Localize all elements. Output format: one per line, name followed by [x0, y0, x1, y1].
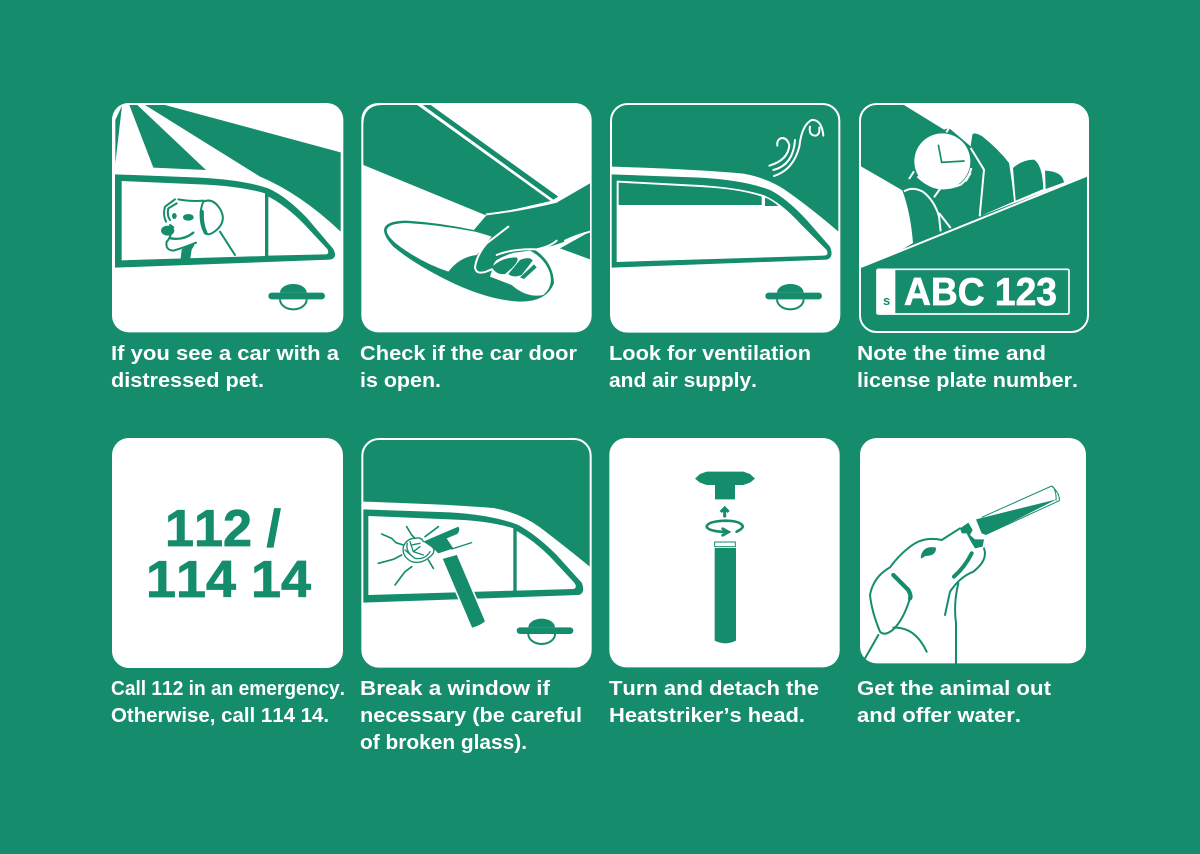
- caption 2: is open.: [360, 369, 441, 392]
- icon: fingers: [904, 133, 1064, 231]
- caption 2: Check if the car door: [360, 342, 577, 365]
- white background wedges: [861, 105, 1087, 267]
- icon: dog in window: [162, 199, 235, 258]
- icon: air swirls: [769, 120, 823, 176]
- car window frame: [115, 174, 335, 268]
- emergency number two: 114 14: [146, 551, 311, 609]
- icon: door handle: [765, 284, 822, 309]
- caption 7: Heatstriker’s head.: [609, 704, 805, 727]
- caption 4: Note the time and: [857, 342, 1046, 365]
- caption 5: [111, 677, 345, 727]
- roof shadow shapes: [115, 105, 341, 232]
- car body: [362, 502, 591, 667]
- car body: [611, 167, 839, 332]
- icon: Heatstriker head: [695, 472, 755, 499]
- caption 2: [360, 342, 577, 392]
- caption 3: Look for ventilation: [609, 342, 811, 365]
- dog nose and mouth: [960, 523, 984, 548]
- icon: up arrow: [721, 508, 729, 517]
- icon: door handle: [517, 619, 573, 644]
- caption 6: of broken glass).: [360, 731, 527, 754]
- panel: emergency numbers: [112, 438, 343, 668]
- caption 5: Call 112 in an emergency.: [111, 677, 345, 700]
- caption 7: [609, 677, 819, 727]
- half-open window glass: [619, 183, 778, 206]
- license plate country letter: s: [883, 293, 890, 308]
- caption 7: Turn and detach the: [609, 677, 819, 700]
- caption 8: and offer water.: [857, 704, 1021, 727]
- icon: wristwatch: [909, 128, 971, 197]
- icon: hammer handle: [442, 554, 486, 629]
- caption 1: [111, 342, 340, 392]
- caption 4: license plate number.: [857, 369, 1078, 392]
- caption 8: [857, 677, 1051, 727]
- caption 6: Break a window if: [360, 677, 550, 700]
- car window frame: [363, 509, 583, 603]
- caption 1: If you see a car with a: [111, 342, 340, 365]
- caption 6: [360, 677, 582, 754]
- caption 6: necessary (be careful: [360, 704, 582, 727]
- caption 3: and air supply.: [609, 369, 757, 392]
- license plate: [877, 269, 1069, 314]
- caption 5: Otherwise, call 114 14.: [111, 704, 329, 727]
- car shadow: [363, 105, 558, 216]
- panel: check car door: [361, 103, 592, 332]
- emergency number one: 112 /: [165, 500, 281, 558]
- panel: distressed pet in car: [112, 103, 343, 332]
- icon: dog drinking from bottle: [865, 486, 1059, 663]
- license plate number: ABC 123: [904, 271, 1057, 314]
- panel: ventilation: [611, 104, 839, 332]
- icon: Heatstriker handle: [715, 542, 736, 643]
- diagonal dividing line: [861, 176, 1087, 267]
- panel: offer water: [860, 438, 1086, 663]
- panel: break a window: [362, 439, 591, 667]
- caption 3: [609, 342, 811, 392]
- fingers: [492, 257, 537, 279]
- panel: time and license plate: [860, 104, 1088, 332]
- icon: broken glass and hammer head: [378, 527, 472, 585]
- icon: door handle: [268, 284, 325, 309]
- caption 4: [857, 342, 1078, 392]
- caption 1: distressed pet.: [111, 369, 264, 392]
- car window frame: [612, 174, 832, 268]
- icon: hand opening door handle: [384, 183, 590, 302]
- icon: rotation arrow: [707, 521, 743, 535]
- caption 8: Get the animal out: [857, 677, 1051, 700]
- water bottle: [976, 486, 1059, 535]
- panel: detach Heatstriker head: [609, 438, 840, 667]
